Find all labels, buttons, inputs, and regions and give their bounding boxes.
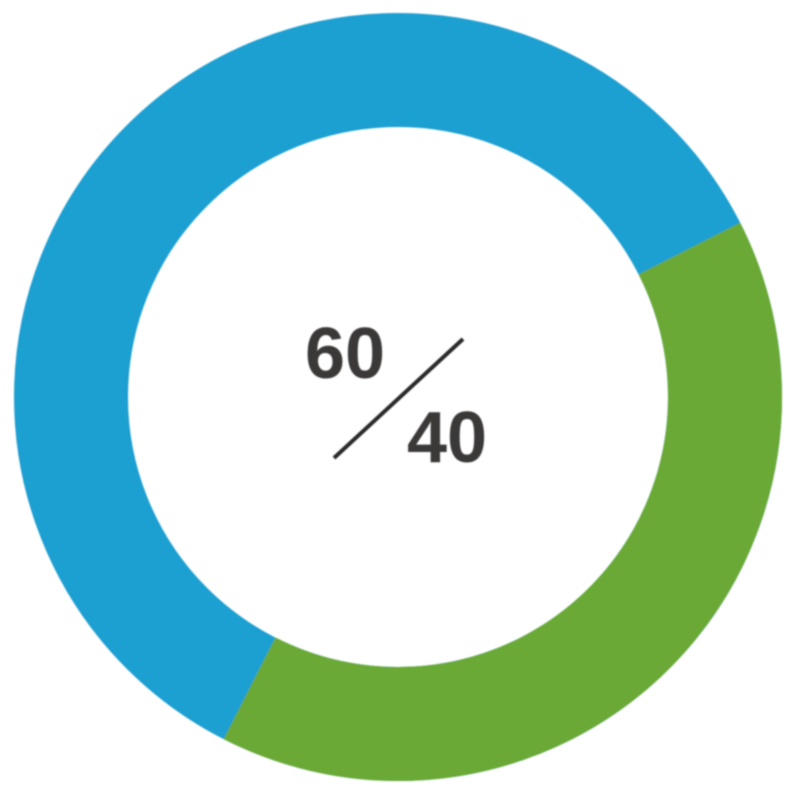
slash divider xyxy=(334,339,463,458)
segment: 60 percent blue xyxy=(71,70,725,724)
value: 60: 60 xyxy=(305,314,385,394)
center label: 60 / 40 xyxy=(305,314,487,478)
value: 40: 40 xyxy=(407,398,487,478)
